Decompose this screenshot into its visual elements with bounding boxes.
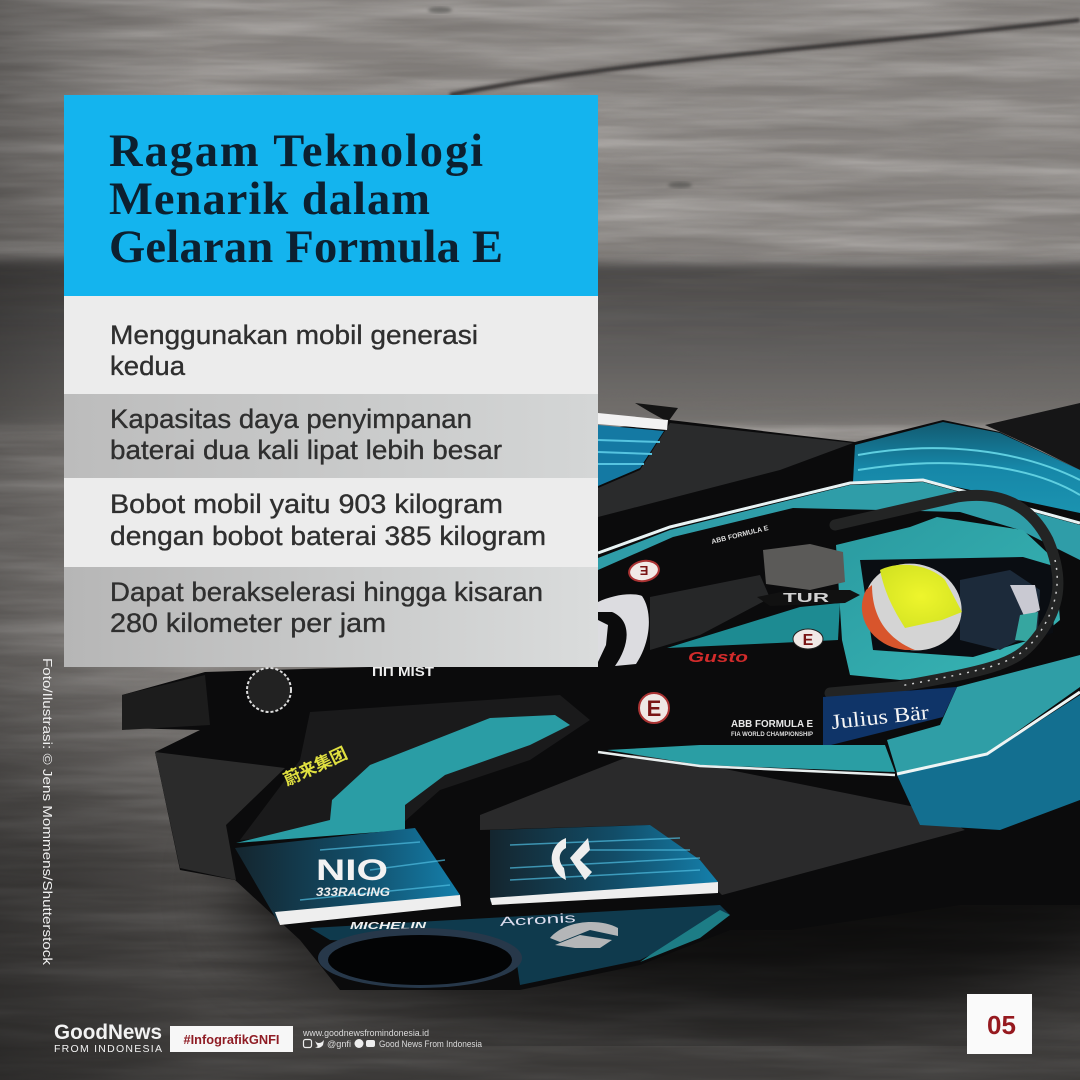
endplate lines <box>598 440 660 464</box>
rear nose cylinder <box>122 675 210 730</box>
helmet <box>855 553 971 661</box>
hashtag box: #InfografikGNFI <box>184 1032 280 1047</box>
carbon tube <box>650 575 770 650</box>
top right wing <box>985 403 1080 470</box>
sponsor: Michelin: MICHELIN <box>350 921 427 932</box>
title: Gelaran Formula E <box>109 222 503 273</box>
sponsor: Acronis: Acronis <box>499 910 577 929</box>
CK wing panel <box>490 825 718 905</box>
panel: text card <box>64 95 598 667</box>
badge: E middle <box>793 629 823 649</box>
row 4 <box>64 567 598 667</box>
NIO wing panel <box>235 828 461 925</box>
row 2 <box>64 394 598 478</box>
glove <box>1010 585 1040 618</box>
medallion logo <box>247 668 291 712</box>
fairing highlights <box>858 448 1080 495</box>
logo: GoodNews from Indonesia <box>54 1021 162 1055</box>
page name: Good News From Indonesia <box>379 1039 483 1050</box>
teal rear fin <box>236 715 570 843</box>
photo credit: Foto/Ilustrasi: © Jens Mommens/Shutterstock <box>40 658 54 966</box>
endplate white stripe <box>598 413 668 430</box>
sponsor: Julius Bär panel <box>823 687 957 747</box>
handle: @gnfi <box>327 1039 351 1050</box>
social media links <box>302 1028 483 1050</box>
badge: E small <box>627 559 661 583</box>
TUR bar: TUR <box>783 590 830 605</box>
badge: E large <box>639 693 669 723</box>
panel heading background <box>64 95 598 296</box>
row 3 <box>64 478 598 567</box>
right lower body teal <box>887 655 1080 773</box>
badge: E small: E <box>639 563 648 578</box>
badge: E middle: E <box>803 632 814 649</box>
glove teal <box>1015 612 1038 642</box>
row 2: baterai dua kali lipat lebih besar <box>110 435 502 465</box>
sponsor: ABB Formula E: FIA WORLD CHAMPIONSHIP <box>731 731 814 738</box>
race car illustration <box>122 403 1080 990</box>
row 1 <box>64 296 598 394</box>
teal band under stripe <box>598 482 1080 570</box>
right lower body blue <box>897 695 1080 830</box>
rear fender carbon <box>240 695 590 840</box>
row 4: Dapat berakselerasi hingga kisaran <box>110 577 543 607</box>
sponsor: Julius Bär panel: Julius Bär <box>830 700 930 734</box>
sponsor: ABB Formula E <box>731 718 814 738</box>
camera block <box>763 544 845 590</box>
row 4: 280 kilometer per jam <box>110 608 386 638</box>
row 3: Bobot mobil yaitu 903 kilogram <box>110 489 503 519</box>
title: Menarik dalam <box>109 174 430 225</box>
white sponsor fragment: ΠΠ MIST <box>372 664 434 679</box>
lower blue sidepod <box>310 905 730 985</box>
logo: GoodNews from Indonesia: GoodNews <box>54 1021 162 1044</box>
sponsor: rotated label: ABB FORMULA E <box>711 525 770 546</box>
sponsor: ABB Formula E: ABB FORMULA E <box>731 718 813 730</box>
top carbon panel <box>598 423 853 517</box>
logo: GoodNews from Indonesia: FROM INDONESIA <box>54 1043 162 1055</box>
NIO wing panel: NIO <box>316 854 388 887</box>
NIO wing panel: 333RACING <box>316 885 390 899</box>
row 1: kedua <box>110 351 185 381</box>
right lower highlight <box>897 692 1080 774</box>
driver arm <box>960 570 1040 650</box>
title <box>109 126 503 273</box>
cockpit opening <box>860 557 1057 657</box>
rear carbon side panel <box>155 752 285 880</box>
sponsor: Gusto: Gusto <box>688 649 748 666</box>
white stripe upper <box>598 480 1080 553</box>
icon: facebook <box>354 1039 364 1048</box>
TUR bar <box>757 590 860 606</box>
row 1: Menggunakan mobil generasi <box>110 320 478 350</box>
front wheel <box>318 928 522 988</box>
title: Ragam Teknologi <box>109 126 483 177</box>
icon: youtube <box>366 1040 375 1047</box>
car body: black silhouette <box>122 420 1080 990</box>
white number shape <box>598 594 649 666</box>
hashtag box <box>170 1026 293 1052</box>
icon: twitter <box>315 1040 324 1048</box>
halo dots <box>900 560 1057 686</box>
cockpit teal surround <box>836 517 1060 680</box>
front wing tip teal <box>640 910 730 962</box>
row 2: Kapasitas daya penyimpanan <box>110 404 472 434</box>
page number: 05 <box>987 1010 1016 1040</box>
lower teal band <box>607 745 895 772</box>
row 3: dengan bobot baterai 385 kilogram <box>110 521 546 551</box>
badge: E large: E <box>647 696 661 721</box>
upper blue fairing <box>853 422 1080 513</box>
blue wing endplate top <box>598 425 664 486</box>
NIO logo grey <box>550 922 618 948</box>
small fin <box>635 403 678 422</box>
halo safety bar <box>830 495 1058 693</box>
yellow chinese sponsor: 蔚来集团 <box>280 743 350 790</box>
icon: instagram <box>304 1040 312 1048</box>
lower white stripe <box>598 752 895 775</box>
mid carbon floor <box>480 752 965 895</box>
page number <box>967 994 1032 1054</box>
social media links: www.goodnewsfromindonesia.id <box>302 1028 429 1039</box>
teal triangle panel <box>667 603 840 648</box>
